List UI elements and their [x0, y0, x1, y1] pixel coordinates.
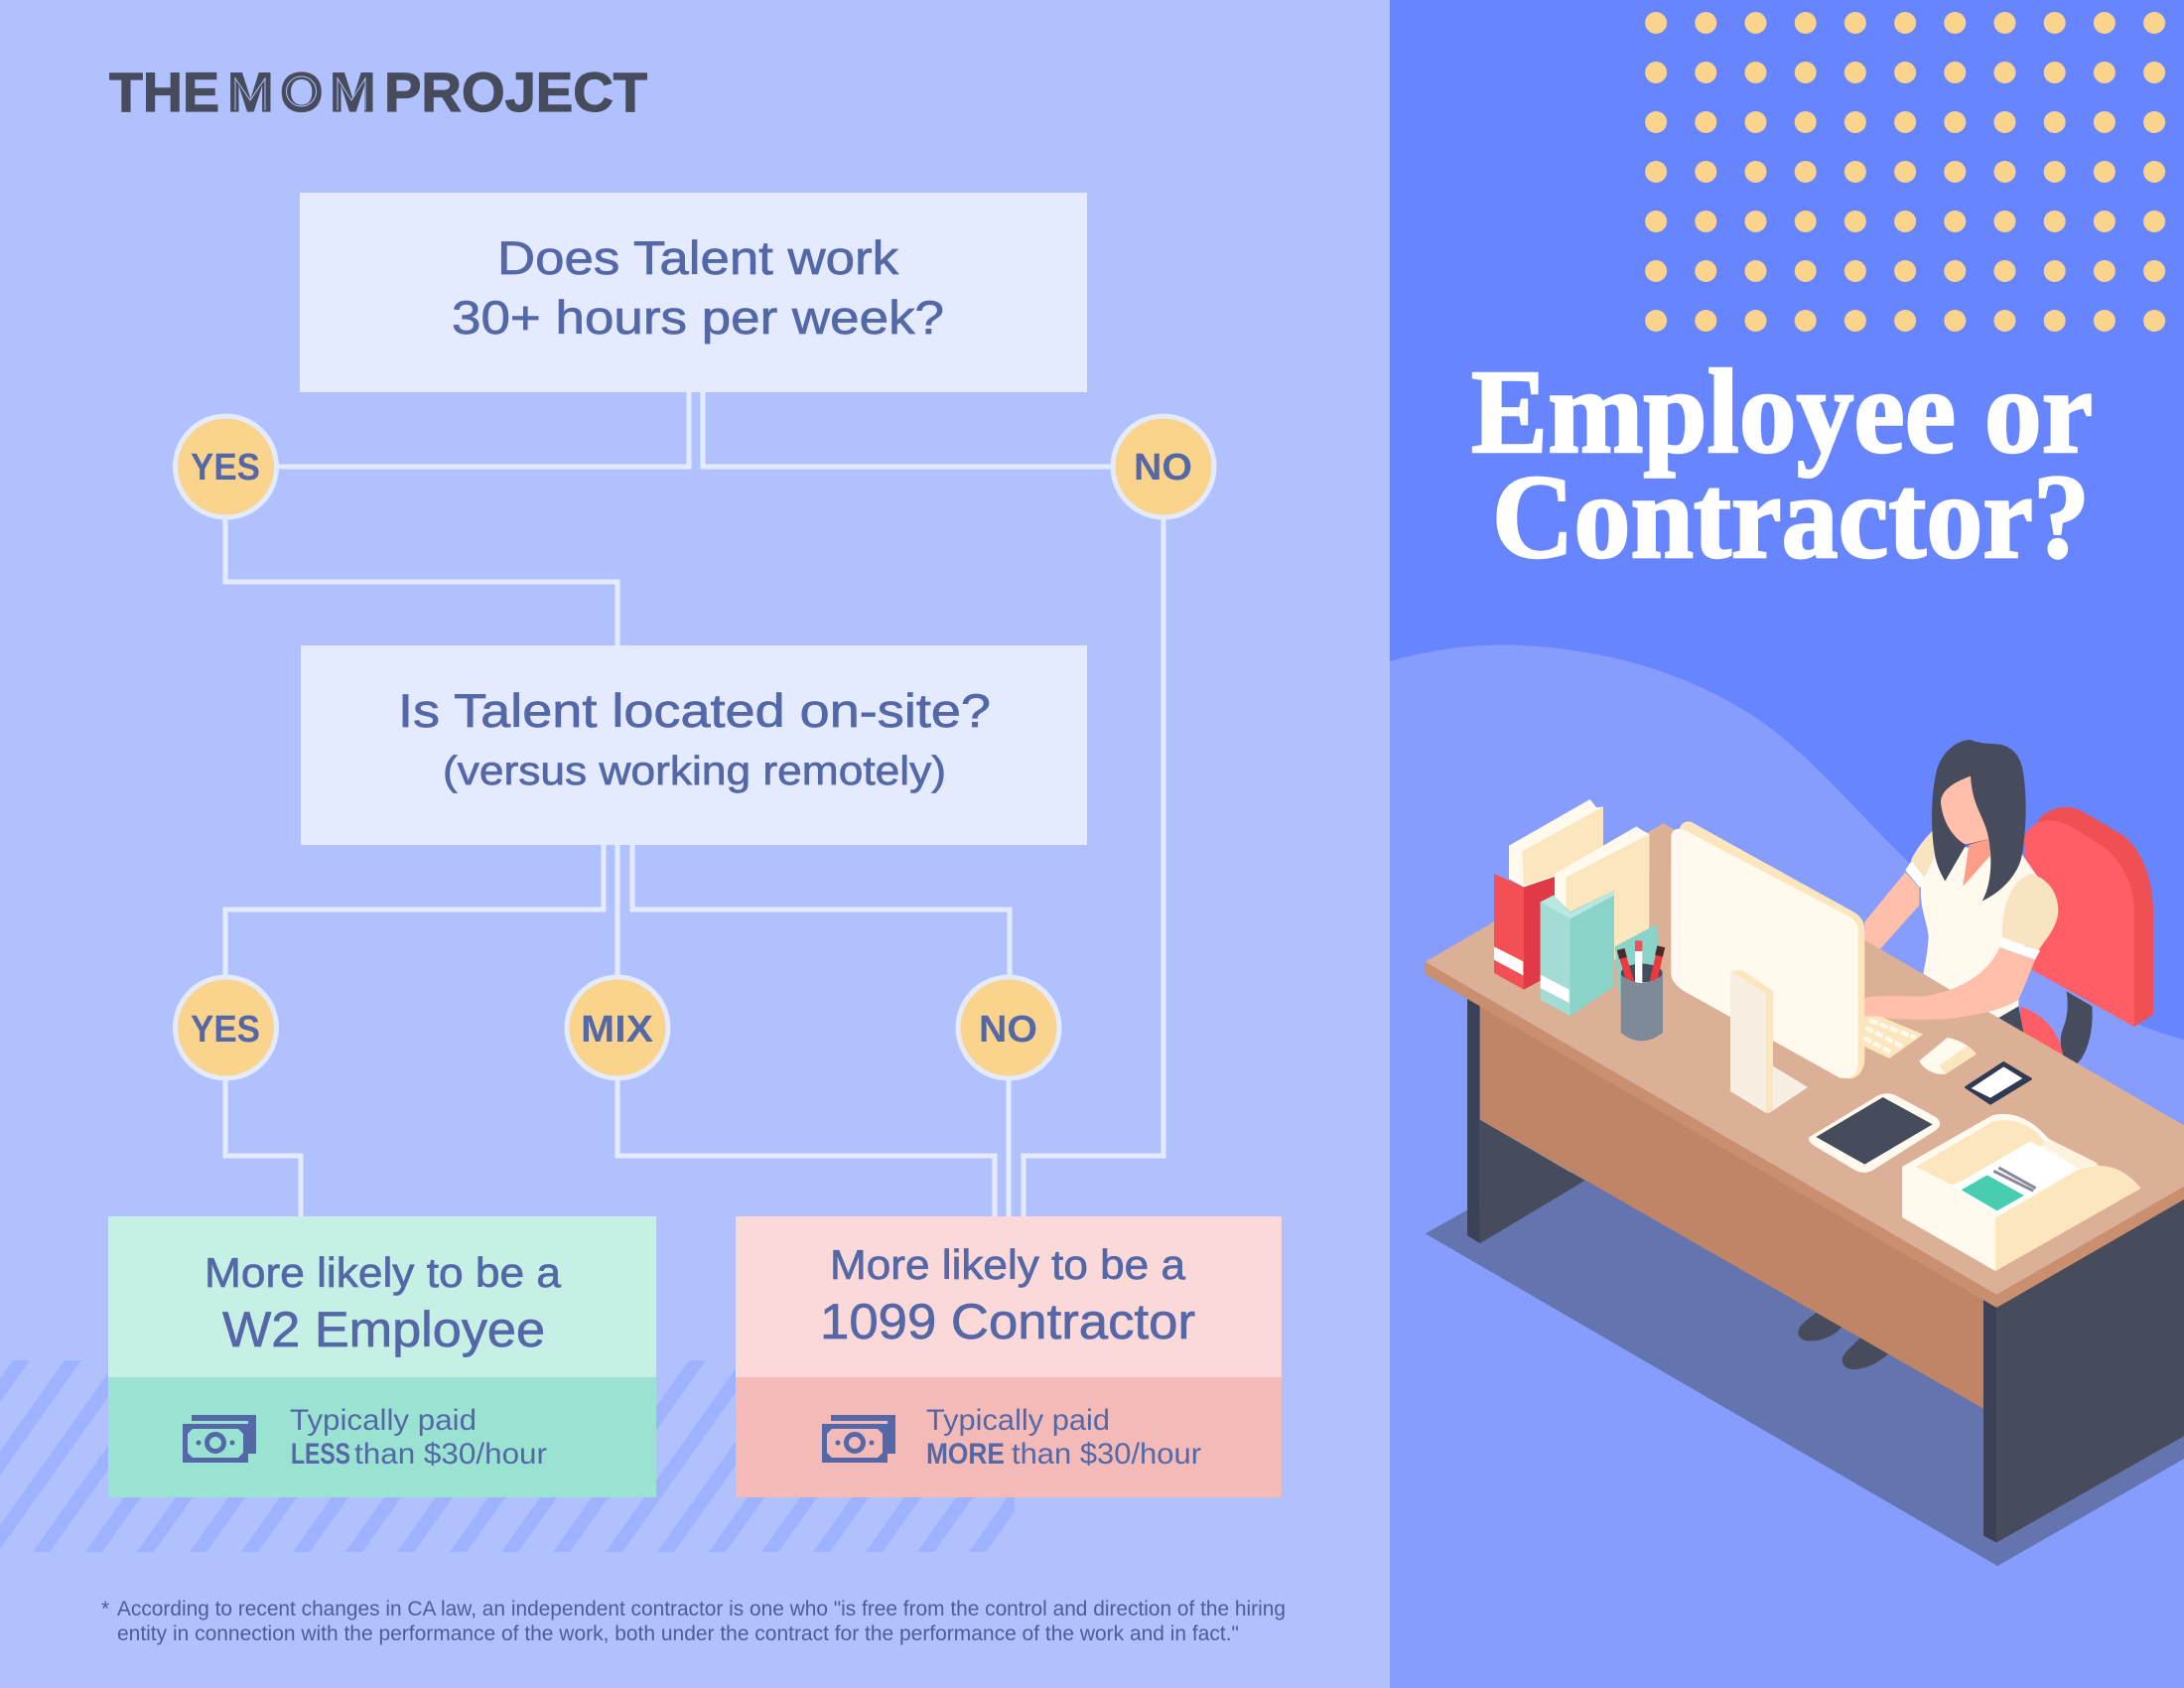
background wave [1390, 645, 2184, 1688]
computer monitor [1671, 821, 1864, 1079]
desk [1426, 823, 2184, 1543]
question 2 text line 1: Is Talent located on-site? [398, 684, 991, 737]
1099 pay text line 1: Typically paid [926, 1404, 1110, 1437]
office chair [1998, 807, 2153, 1064]
question 1 text line 2: 30+ hours per week? [452, 291, 944, 344]
pen cup [1621, 940, 1663, 1041]
1099 heading line 1: More likely to be a [830, 1241, 1186, 1288]
panel: 1099 contractor outcome [736, 1216, 1282, 1497]
icon: money [185, 1415, 256, 1460]
monitor stand [1730, 970, 1808, 1113]
flow connector lines [225, 391, 1163, 1216]
title: Contractor? [1492, 451, 2090, 584]
panel: question 2 [301, 645, 1087, 845]
node: no, question 1 [1113, 416, 1214, 517]
question 2 text line 2: (versus working remotely) [443, 748, 946, 793]
illustration: woman at desk [1426, 740, 2184, 1566]
binders and papers [1494, 799, 1660, 1016]
node: yes, question 2 [175, 977, 276, 1078]
question 1 text line 1: Does Talent work [497, 231, 899, 284]
node: yes, question 1 [175, 416, 276, 517]
footnote [101, 1598, 1286, 1645]
tablet and paper tray [1809, 1093, 2141, 1271]
panel: left background [0, 0, 1390, 1688]
panel: right background [1390, 0, 2184, 1688]
title: Employee or [1471, 346, 2093, 479]
footnote: entity in connection with the performance of the work, both under the contract for the performance of the work and in fact." [117, 1622, 1239, 1645]
logo word: MOM: MOM [227, 61, 376, 123]
decorative stripes [0, 1360, 1122, 1552]
node: no, question 1: NO [1134, 447, 1192, 489]
keyboard, mouse, phone [1863, 1016, 2031, 1104]
W2 pay text line 2: LESS [291, 1438, 350, 1471]
panel: question 1 [300, 193, 1087, 392]
W2 pay text line 1: Typically paid [290, 1404, 477, 1437]
node: mix, question 2 [567, 977, 668, 1078]
logo: The Mom Project [109, 61, 647, 123]
icon: money [824, 1415, 895, 1460]
desk shadow [1426, 1168, 2184, 1566]
dot grid [1631, 0, 2179, 346]
node: no, question 2 [958, 977, 1059, 1078]
W2 heading line 2: W2 Employee [222, 1302, 545, 1357]
title [1471, 346, 2093, 584]
logo word: PROJECT: PROJECT [384, 61, 647, 123]
woman: forearm [1864, 947, 2035, 1020]
1099 pay text line 2: than $30/hour [1012, 1438, 1201, 1471]
node: no, question 2: NO [979, 1009, 1037, 1051]
node: mix, question 2: MIX [581, 1009, 654, 1051]
1099 pay text line 2: MORE [926, 1438, 1005, 1471]
footnote: According to recent changes in CA law, an independent contractor is one who "is free from the control and direction of the hiring [117, 1598, 1286, 1620]
W2 heading line 1: More likely to be a [205, 1249, 562, 1296]
1099 heading line 2: 1099 Contractor [820, 1294, 1195, 1349]
logo word: THE: THE [109, 61, 219, 123]
footnote: * [101, 1598, 109, 1620]
panel: W2 employee outcome [108, 1216, 656, 1497]
woman: torso and hair [1864, 740, 2058, 1018]
node: yes, question 2: YES [191, 1009, 260, 1051]
node: yes, question 1: YES [191, 447, 260, 489]
W2 pay text line 2: than $30/hour [354, 1438, 547, 1471]
